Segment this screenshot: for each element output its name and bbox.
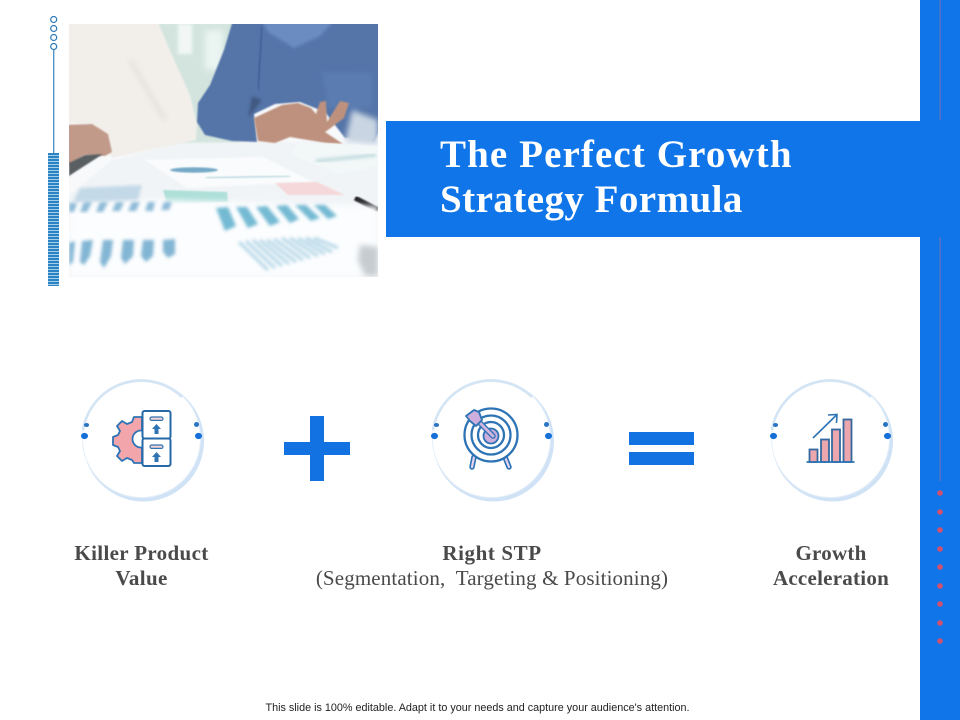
ring <box>431 380 554 502</box>
pen <box>355 198 378 210</box>
label: right STP <box>316 540 668 590</box>
photo: business meeting at desk <box>69 24 378 277</box>
title band <box>386 121 920 237</box>
circle badge: killer product value <box>81 379 204 502</box>
circle badge: growth acceleration <box>770 379 893 502</box>
icon: gear with boxes <box>113 411 170 466</box>
left hand and laptop <box>64 124 112 165</box>
icon: rising bar chart <box>806 414 854 462</box>
circle badge: right STP <box>431 379 554 502</box>
gesturing hand <box>254 101 349 144</box>
label: growth acceleration <box>773 540 889 590</box>
title <box>440 132 793 220</box>
equals sign <box>629 432 694 465</box>
ring <box>81 380 204 502</box>
blue shirt <box>197 20 385 142</box>
desk <box>176 142 239 146</box>
label: right STP: Right STP <box>442 540 542 564</box>
plus sign <box>284 416 350 481</box>
title: The Perfect Growth <box>440 132 793 176</box>
footer note: This slide is 100% editable. Adapt it to your needs and capture your audience's attention. <box>265 702 690 714</box>
sticky notes <box>163 190 228 204</box>
label: killer product value: Killer Product <box>74 540 209 564</box>
label: growth acceleration: Acceleration <box>773 566 889 590</box>
icon: target with arrow <box>464 408 518 467</box>
tablet and papers on right <box>320 142 342 145</box>
window background <box>158 24 240 144</box>
right sidebar <box>920 0 960 720</box>
white shirt <box>60 20 197 158</box>
ring <box>770 380 893 502</box>
label: right STP: (Segmentation, Targeting & Positioning) <box>316 566 668 590</box>
label: killer product value: Value <box>115 566 168 590</box>
blurred report <box>69 200 378 277</box>
label: growth acceleration: Growth <box>795 540 867 564</box>
title: Strategy Formula <box>440 178 743 220</box>
decorative timeline: rings and striped bar <box>48 16 59 286</box>
label: killer product value <box>74 540 209 590</box>
